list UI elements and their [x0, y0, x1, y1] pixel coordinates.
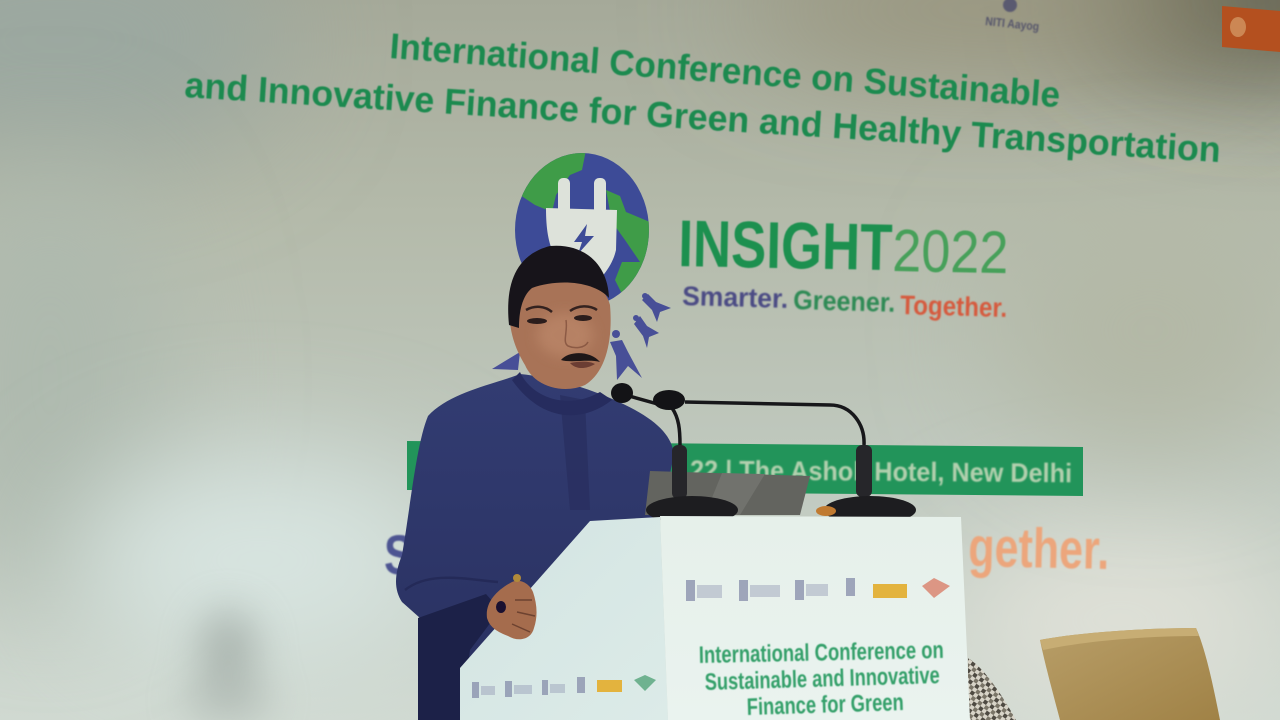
- podium front panel: [660, 516, 970, 720]
- large slogan behind podium: [384, 515, 1110, 586]
- logo: NITI Aayog: NITI Aayog: [985, 14, 1040, 34]
- tagline: Greener.: [793, 285, 896, 318]
- speaker cheek highlight: [537, 313, 593, 357]
- podium heading: International Conference on: [699, 637, 944, 669]
- conference title on backdrop: and Innovative Finance for Green and Healthy Transportation: [183, 64, 1222, 170]
- tagline: Together.: [900, 290, 1008, 323]
- speaker mouth: [570, 362, 595, 368]
- tagline: Smarter.: [682, 281, 789, 314]
- large slogan behind podium: S: [384, 523, 414, 586]
- shirt placket: [560, 395, 590, 510]
- microphones: [611, 383, 916, 524]
- conference title on backdrop: International Conference on Sustainable: [388, 25, 1062, 115]
- podium: [460, 516, 970, 720]
- logo: NITI Aayog: [985, 0, 1040, 34]
- top logos: [985, 0, 1280, 52]
- podium side logos: [472, 675, 656, 698]
- podium front logos: [686, 578, 950, 601]
- speaker eyes: [526, 306, 597, 324]
- speaker hair: [508, 246, 609, 328]
- podium side panel: [460, 517, 668, 720]
- plug lightning bolt: [574, 224, 594, 254]
- INSIGHT2022 wordmark: 2022: [892, 217, 1009, 286]
- people figures: [492, 293, 671, 380]
- logo: globe with plug: [492, 149, 671, 380]
- shirt shading: [418, 594, 500, 720]
- INSIGHT2022 wordmark: INSIGHT: [678, 206, 893, 284]
- speaker face: [509, 275, 611, 389]
- date and venue strip: 22 | The Ashok Hotel, New Delhi: [690, 455, 1072, 488]
- speaker shadow on backdrop: [183, 608, 273, 720]
- seated person patterned shirt: [968, 658, 1016, 720]
- microphone right: [653, 390, 916, 524]
- speaker collar: [512, 372, 612, 415]
- logo: orange badge: [1222, 6, 1280, 52]
- globe continents: [522, 153, 649, 292]
- speaker: [396, 246, 674, 720]
- plug: [546, 178, 617, 290]
- tagline: [682, 281, 1008, 323]
- large slogan behind podium: gether.: [968, 515, 1110, 581]
- chair: [1040, 628, 1220, 720]
- microphone left: [611, 383, 738, 524]
- speaker moustache: [561, 353, 600, 362]
- date and venue strip: [407, 441, 1083, 496]
- speaker body: [396, 374, 674, 720]
- speaker nose: [565, 320, 588, 348]
- podium heading: Sustainable and Innovative: [704, 662, 940, 696]
- podium heading: [699, 637, 944, 720]
- speaker hand over podium: [487, 574, 537, 639]
- podium heading: Finance for Green: [746, 689, 904, 720]
- laptop: [645, 471, 810, 515]
